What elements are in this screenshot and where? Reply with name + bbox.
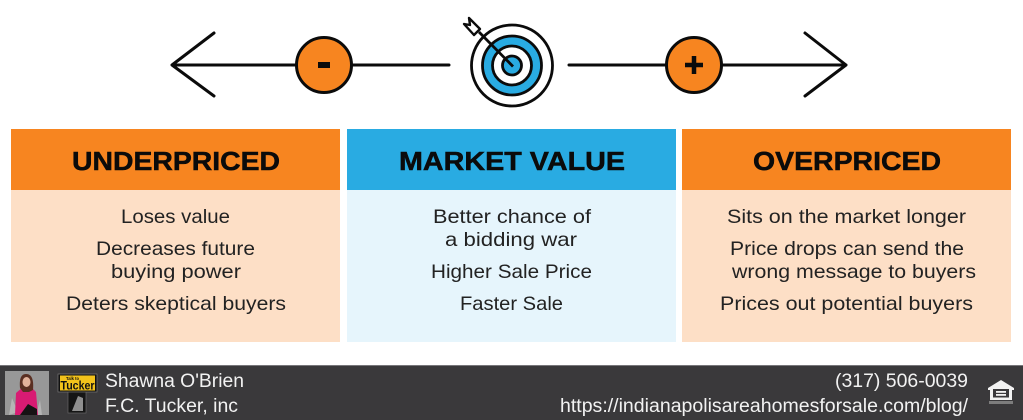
text: underpriced effects: Loses value [121,206,230,228]
heading: overpriced: OVERPRICED [753,146,941,176]
text: market value effects [431,206,592,315]
text: underpriced effects: Decreases future [96,238,255,260]
icon: Talk to Tucker logo [58,374,97,413]
scale: pricing arrow [172,18,846,106]
panel: market value [347,129,676,342]
icon: Talk to Tucker logo: Talk to [66,376,79,381]
text: overpriced effects: Price drops can send the [730,238,964,260]
icon: agent photo [5,371,49,415]
footer bar [0,365,1023,420]
text: agent name and company: F.C. Tucker, inc [105,396,238,417]
heading: underpriced [11,129,340,190]
text: underpriced effects: Deters skeptical buyers [66,293,286,315]
text: underpriced effects: buying power [111,261,242,283]
text: phone and website: (317) 506-0039 [835,371,968,392]
text: phone and website: https://indianapolisareahomesforsale.com/blog/ [560,396,969,417]
text: agent name and company: Shawna O'Brien [105,371,244,392]
panel: underpriced [11,129,340,342]
arrow: left, lower price [172,33,449,96]
text: market value effects: a bidding war [445,229,578,251]
text: overpriced effects: Sits on the market longer [727,206,967,228]
text: overpriced effects [720,206,976,315]
icon: Talk to Tucker logo: Tucker [60,380,95,392]
text: underpriced effects [66,206,286,315]
icon: equal housing opportunity [988,380,1014,404]
heading: underpriced: UNDERPRICED [72,146,280,176]
panel: overpriced [682,129,1011,342]
text: market value effects: Higher Sale Price [431,261,592,283]
icon: target with arrow [464,18,552,106]
arrow: right, higher price [569,33,846,96]
text: agent name and company [105,371,244,417]
text: overpriced effects: wrong message to buyers [731,261,976,283]
icon: minus badge [296,38,352,92]
heading: market value [347,129,676,190]
heading: market value: MARKET VALUE [399,146,625,176]
text: overpriced effects: Prices out potential buyers [720,293,973,315]
icon: plus badge [666,38,722,92]
text: market value effects: Better chance of [433,206,592,228]
heading: overpriced [682,129,1011,190]
text: phone and website [560,371,969,417]
text: market value effects: Faster Sale [460,293,563,315]
